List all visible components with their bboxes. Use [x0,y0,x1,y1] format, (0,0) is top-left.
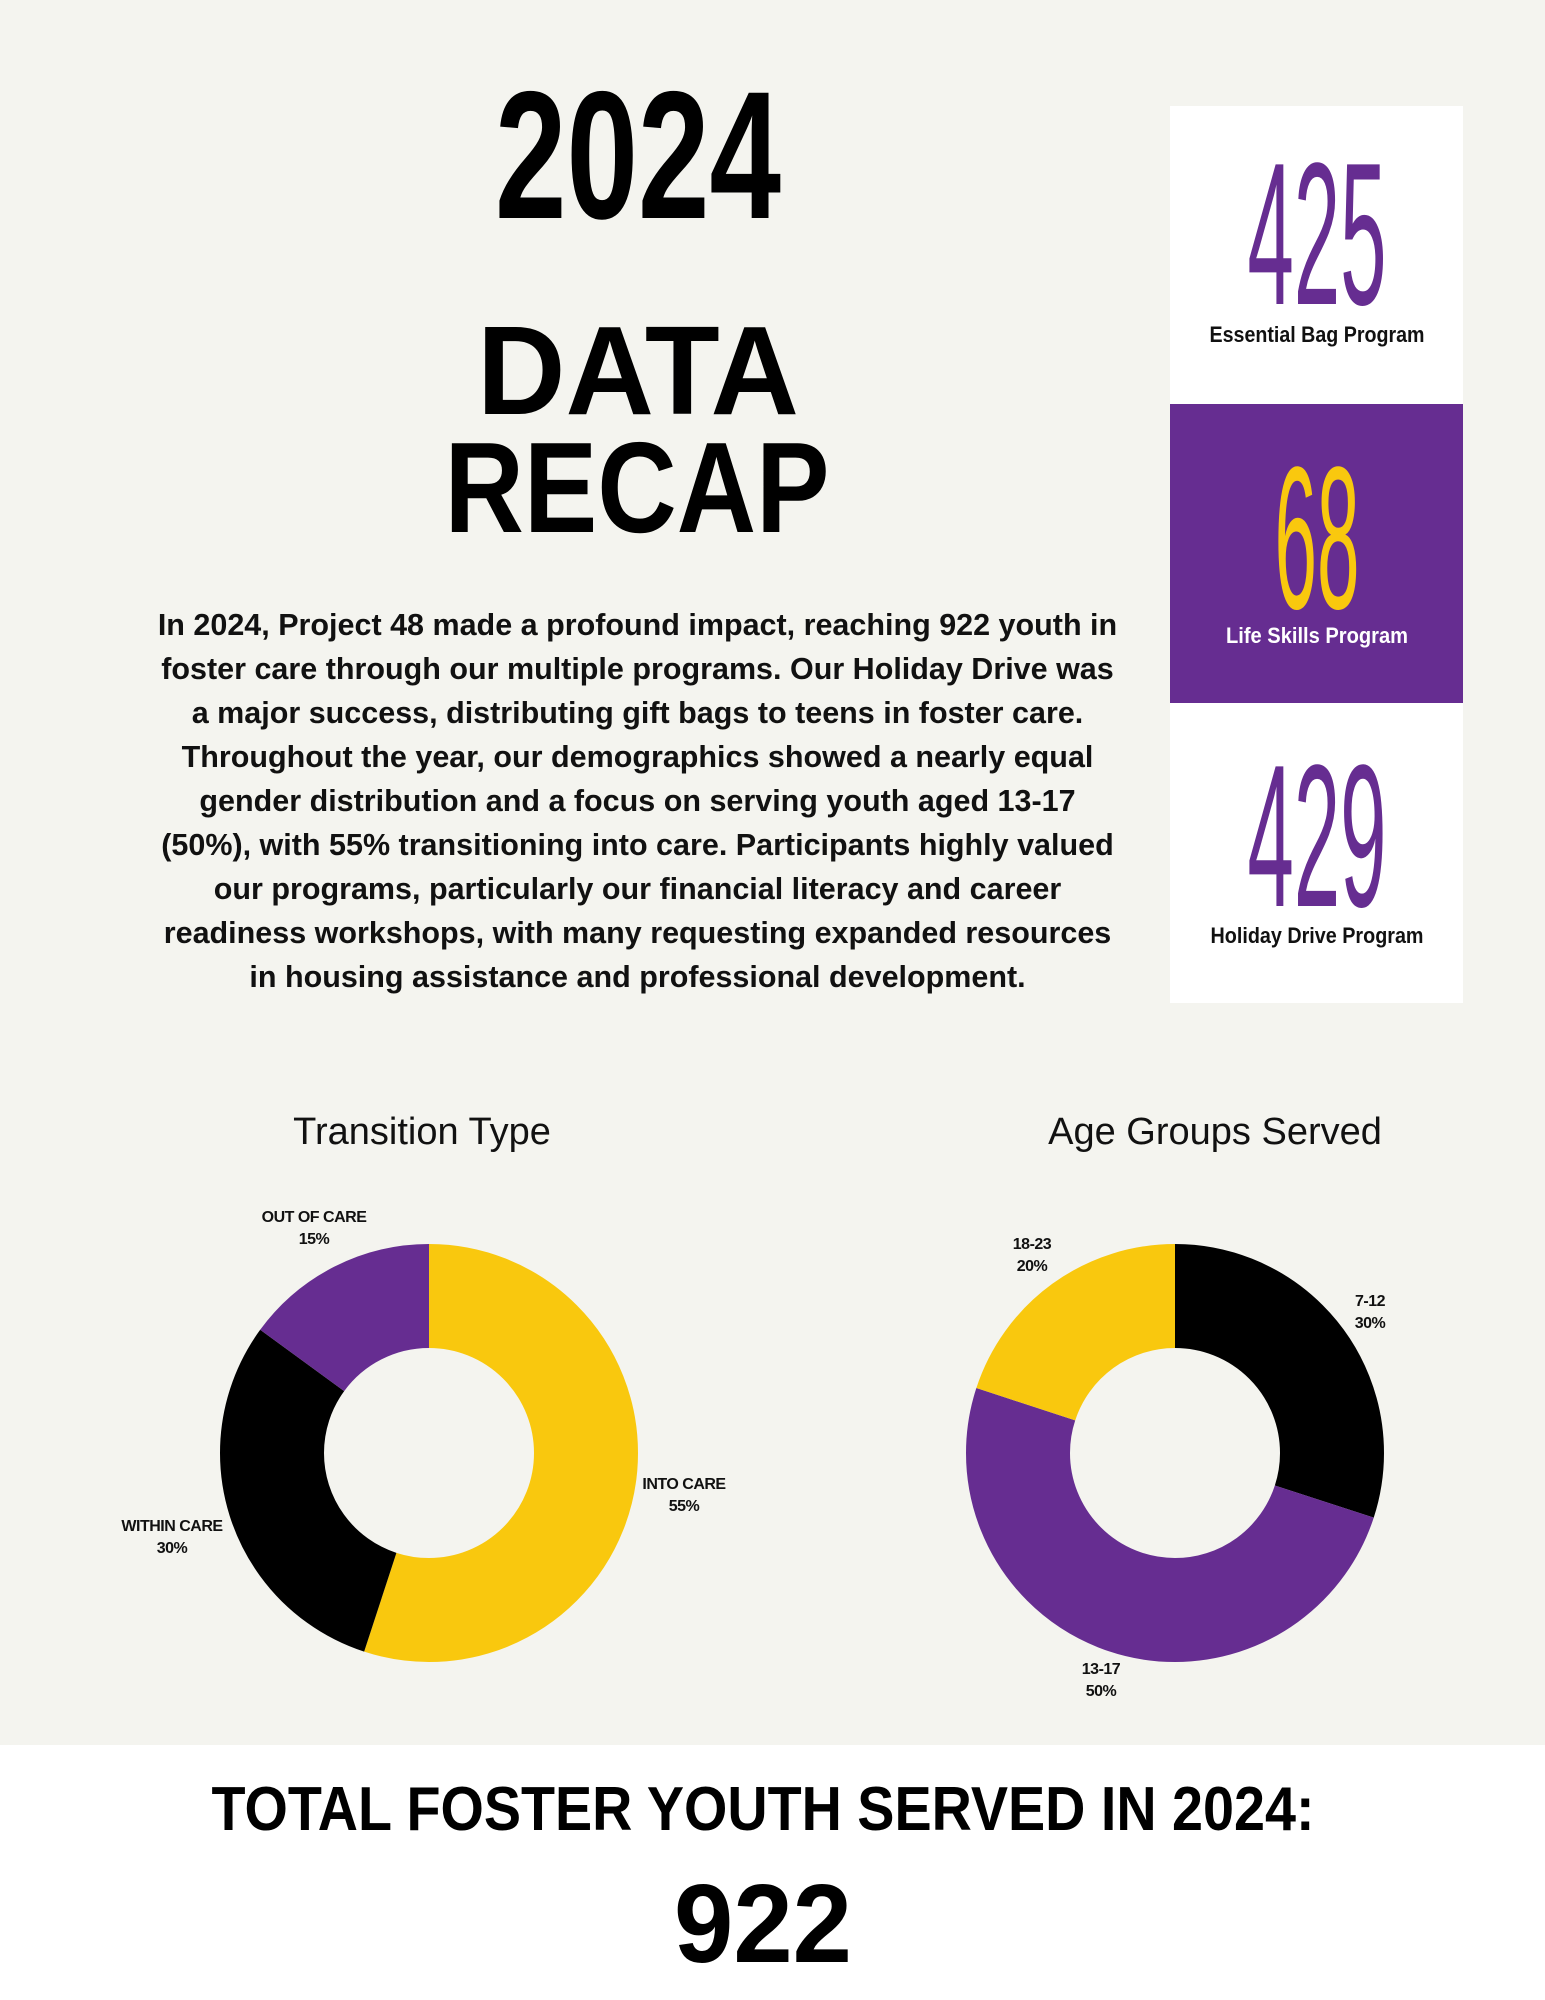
text block: summary paragraph: foster care through our multiple programs. Our Holiday Drive was [161,652,1114,686]
label: 18-23: 18-23 [1013,1236,1051,1253]
panel: program stats [1170,106,1463,1003]
label: out of care [262,1209,366,1248]
stat: life skills: Life Skills Program [1226,623,1408,648]
text block: summary paragraph: in housing assistance and professional development. [249,960,1026,994]
stat: essential bag: Essential Bag Program [1210,322,1424,347]
chart: age donut [966,1244,1384,1662]
text block: summary paragraph: (50%), with 55% transitioning into care. Participants highly valued [161,828,1114,862]
label: 7-12: 7-12 [1355,1293,1385,1310]
label: into care: INTO CARE [642,1476,726,1493]
label: 7-12: 30% [1355,1315,1385,1332]
title year: 2024 [495,53,781,257]
label: out of care: 15% [299,1231,329,1248]
label: 13-17 [1082,1661,1120,1700]
label: 18-23 [1013,1236,1052,1275]
total heading: TOTAL FOSTER YOUTH SERVED IN 2024: [212,1775,1314,1844]
total number: 922 [674,1862,852,1986]
footer: total served [212,1775,1314,1986]
label: 13-17: 13-17 [1082,1661,1120,1678]
heading: transition type: Transition Type [293,1111,551,1153]
text block: summary paragraph: our programs, particularly our financial literacy and career [214,872,1061,906]
label: into care: 55% [669,1498,699,1515]
title words: DATA [477,300,799,441]
label: out of care: OUT OF CARE [262,1209,366,1226]
text block: summary paragraph: gender distribution and a focus on serving youth aged 13-17 [199,784,1076,818]
text block: summary paragraph: readiness workshops, with many requesting expanded resources [164,916,1111,950]
text block: summary paragraph [158,608,1117,994]
text block: summary paragraph: a major success, distributing gift bags to teens in foster care. [192,696,1083,730]
stat: holiday drive [1170,703,1463,1003]
label: within care: WITHIN CARE [121,1518,223,1535]
label: 18-23: 20% [1017,1258,1047,1275]
label: 13-17: 50% [1086,1683,1116,1700]
chart: transition donut [220,1244,638,1662]
title: 2024 data recap [444,53,830,560]
text block: summary paragraph: In 2024, Project 48 made a profound impact, reaching 922 youth in [158,608,1117,642]
stat: holiday drive: Holiday Drive Program [1210,923,1424,948]
text block: summary paragraph: Throughout the year, our demographics showed a nearly equal [182,740,1093,774]
label: within care [121,1518,223,1557]
stat: essential bag [1170,106,1463,404]
label: 7-12 [1355,1293,1386,1332]
heading: age groups: Age Groups Served [1048,1111,1382,1153]
label: within care: 30% [157,1540,187,1557]
stat: life skills [1170,404,1463,703]
label: into care [642,1476,726,1515]
title words: RECAP [444,416,830,560]
title words [444,300,830,560]
